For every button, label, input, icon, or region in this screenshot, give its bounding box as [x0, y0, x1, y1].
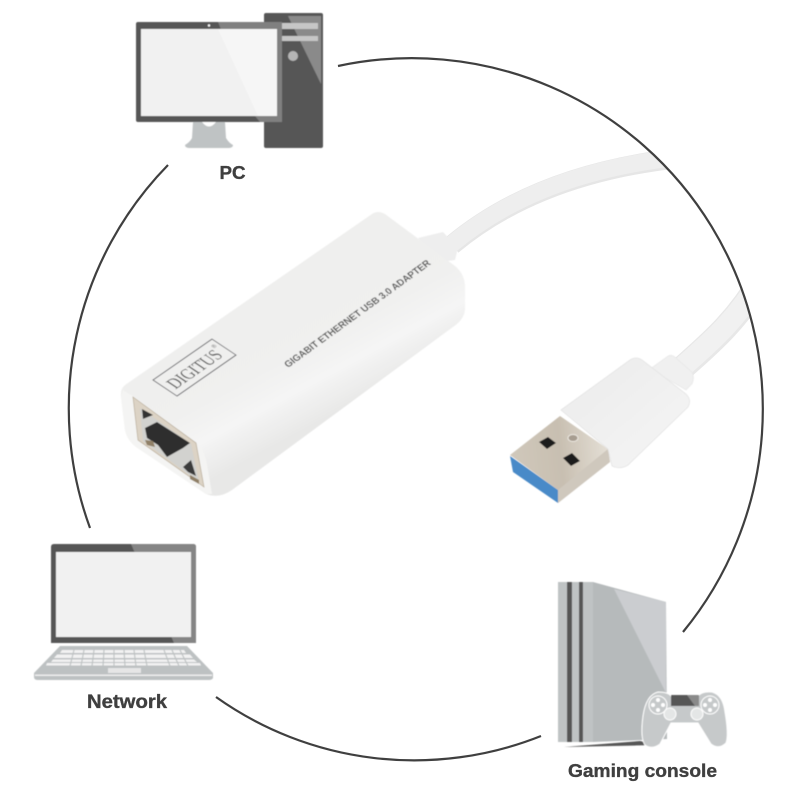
- console front: [593, 582, 667, 742]
- controller touchpad: [671, 695, 699, 706]
- DIGITUS logo: DIGITUS: [161, 346, 227, 392]
- ethernet adapter: [121, 212, 465, 496]
- controller body: [642, 692, 727, 747]
- connector hole: [539, 437, 556, 449]
- screen reflection: [218, 29, 277, 116]
- plug overmold: [561, 358, 690, 468]
- cable strain relief: [418, 232, 458, 262]
- keyboard: [46, 650, 201, 666]
- laptop screen: [56, 552, 191, 637]
- monitor stand: [185, 122, 233, 148]
- port upper tab: [145, 440, 155, 447]
- console shine: [614, 589, 666, 693]
- strain relief: [650, 355, 694, 390]
- metal shell: [510, 416, 610, 503]
- connector hole: [563, 453, 580, 466]
- ethernet port: [133, 397, 204, 487]
- adapter body: [121, 212, 465, 496]
- webcam: [208, 24, 210, 27]
- laptop icon: [34, 544, 213, 680]
- shell dimple: [568, 434, 578, 442]
- base edge: [35, 674, 212, 676]
- tower: [264, 13, 323, 148]
- Network label: Network: [87, 692, 167, 713]
- product name: GIGABIT ETHERNET USB 3.0 ADAPTER: [282, 258, 433, 370]
- monitor screen: [141, 29, 277, 116]
- monitor shine: [218, 22, 282, 122]
- cable to USB plug: [676, 289, 750, 375]
- console dark stripes: [567, 582, 583, 742]
- USB plug: [510, 355, 694, 503]
- port frame: [133, 397, 204, 487]
- controller thumbsticks: [664, 708, 703, 720]
- console stand: [564, 741, 660, 747]
- Gaming console label: Gaming console: [568, 761, 717, 781]
- blue connector tongue: [510, 456, 558, 503]
- tower shine: [288, 16, 321, 84]
- laptop lid: [51, 544, 196, 643]
- controller d-pad: [649, 696, 667, 714]
- game controller: [642, 692, 727, 747]
- port dark contacts: [145, 422, 190, 457]
- controller buttons: [701, 696, 719, 714]
- power button: [288, 51, 298, 61]
- console side strips: [558, 582, 593, 742]
- stand notch: [202, 122, 216, 126]
- port cavity: [140, 408, 199, 482]
- port lower tab: [190, 475, 199, 484]
- PC label: PC: [220, 163, 246, 183]
- drive bays: [282, 23, 318, 41]
- PC icon: [136, 13, 323, 148]
- controller button dots: [651, 698, 717, 712]
- DIGITUS logo: ®: [210, 343, 219, 350]
- laptop base: [34, 646, 213, 680]
- port lower notch: [183, 460, 196, 476]
- keyboard gaps: [70, 650, 188, 666]
- adapter front face: [121, 390, 212, 494]
- lid shine: [131, 544, 196, 643]
- circular connection ring: [69, 58, 763, 760]
- port upper notch: [142, 409, 153, 419]
- monitor frame: [136, 22, 282, 122]
- gaming console icon: [558, 582, 727, 747]
- cable to adapter: [452, 157, 680, 245]
- trackpad: [108, 668, 141, 673]
